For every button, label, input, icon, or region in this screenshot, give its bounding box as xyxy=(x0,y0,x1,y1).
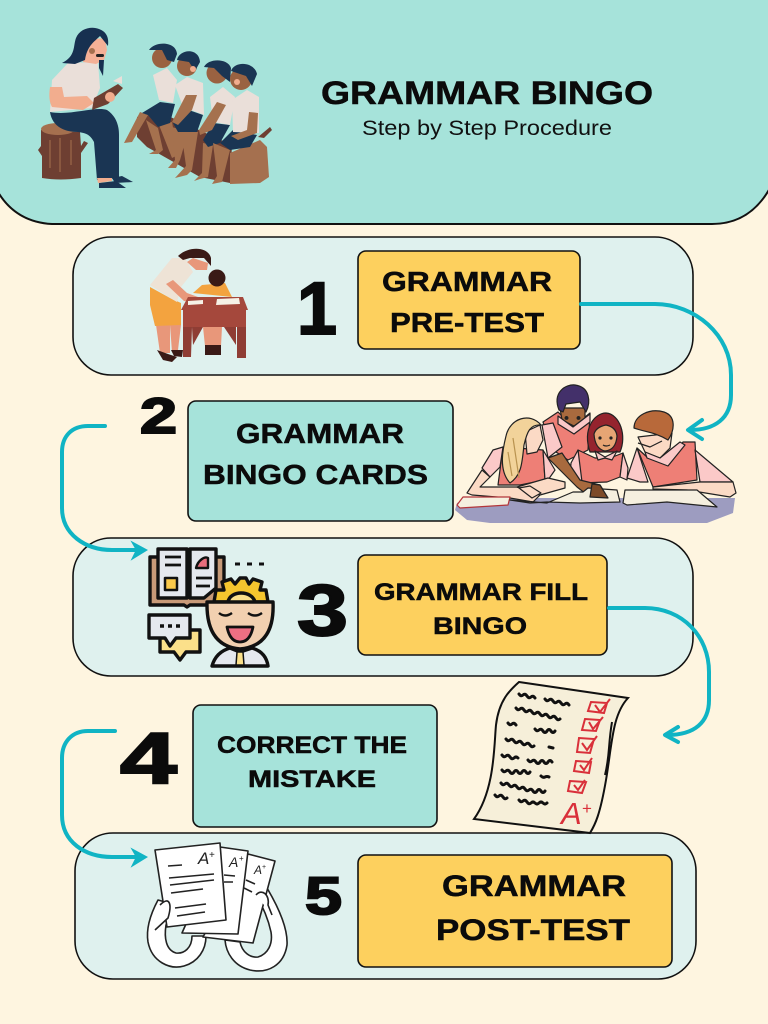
number 2: 2 xyxy=(140,388,177,444)
gear xyxy=(214,578,268,602)
number 5: 5 xyxy=(305,867,342,926)
arrow head: step 5 pointer xyxy=(133,850,146,865)
title: GRAMMAR BINGO xyxy=(321,75,653,111)
number 3: 3 xyxy=(297,571,348,651)
number 4: 4 xyxy=(120,719,177,799)
panel: header band xyxy=(0,0,768,224)
box: Grammar Fill Bingo: BINGO xyxy=(433,613,527,640)
icon: hands holding graded papers: + xyxy=(239,854,244,863)
box: Correct the Mistake: MISTAKE xyxy=(248,766,376,793)
box: Grammar Bingo Cards xyxy=(188,401,453,521)
icon: teacher helping pupil at desk xyxy=(150,249,248,362)
arrow: step 4 to step 5 xyxy=(62,731,142,857)
box: Grammar Bingo Cards: BINGO CARDS xyxy=(203,459,428,490)
pointing arm xyxy=(548,453,608,498)
box: Grammar Post-Test xyxy=(358,855,672,967)
icon: hands holding graded papers: A xyxy=(197,849,209,868)
icon: hands holding graded papers xyxy=(147,843,287,971)
red-haired student xyxy=(578,450,623,483)
teacher xyxy=(49,28,133,188)
illustration: graded test paper xyxy=(474,682,628,833)
student four xyxy=(212,64,259,184)
box: Correct the Mistake xyxy=(193,705,437,827)
bubbles xyxy=(160,630,200,660)
collar xyxy=(212,648,268,666)
student one xyxy=(124,44,178,158)
box: Grammar Pre-Test xyxy=(358,251,580,349)
box: Grammar Pre-Test: GRAMMAR xyxy=(382,266,552,297)
illustration: teacher reading to students xyxy=(38,28,272,188)
icon: thinking head with book and speech bubbles xyxy=(149,549,273,666)
illustration: graded test paper: + xyxy=(582,799,592,818)
dots xyxy=(235,562,264,566)
head xyxy=(207,602,273,649)
panel: step 1 band xyxy=(73,237,693,375)
grade: A xyxy=(559,796,582,831)
icon: hands holding graded papers: A xyxy=(253,863,262,877)
arrow: step 1 to students xyxy=(581,304,731,439)
box: Grammar Fill Bingo xyxy=(358,555,607,655)
icon: hands holding graded papers: A xyxy=(228,854,238,870)
illustration: students reading together xyxy=(455,385,736,523)
number 1: 1 xyxy=(297,267,337,350)
standing student face xyxy=(564,416,580,420)
panel: step 3 band xyxy=(73,538,693,676)
glasses student xyxy=(637,442,697,487)
subtitle: Step by Step Procedure xyxy=(362,117,612,140)
log bench xyxy=(137,110,272,184)
book xyxy=(150,557,224,607)
check boxes xyxy=(568,699,610,793)
blonde student xyxy=(498,447,545,485)
box: Grammar Post-Test: POST-TEST xyxy=(436,914,630,947)
tree stump seat xyxy=(38,123,88,180)
text scribbles xyxy=(495,694,569,804)
icon: hands holding graded papers: + xyxy=(209,850,215,861)
open books xyxy=(457,497,510,508)
arrow head: step 3 pointer xyxy=(133,543,146,558)
student three xyxy=(194,60,235,181)
panel: step 5 band xyxy=(75,833,696,979)
box: Grammar Pre-Test: PRE-TEST xyxy=(390,307,544,338)
arrow: step 3 to graded paper xyxy=(609,608,709,742)
icon: hands holding graded papers: + xyxy=(262,864,266,871)
box: Correct the Mistake: CORRECT THE xyxy=(217,732,407,759)
box: Grammar Post-Test: GRAMMAR xyxy=(442,870,626,903)
box: Grammar Bingo Cards: GRAMMAR xyxy=(236,418,404,449)
student two xyxy=(168,51,204,178)
standing student xyxy=(543,412,590,460)
box: Grammar Fill Bingo: GRAMMAR FILL xyxy=(374,579,588,606)
arrow: step 2 to step 3 xyxy=(62,426,142,550)
